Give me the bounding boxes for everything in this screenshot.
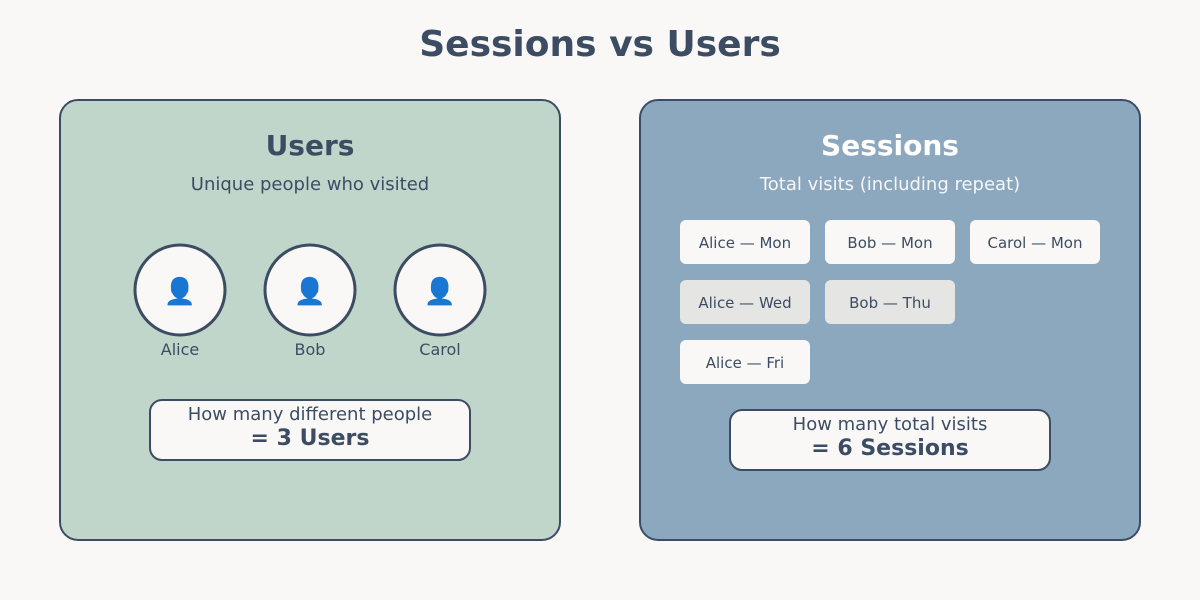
users result box	[150, 400, 470, 460]
sessions result box	[730, 410, 1050, 470]
users result box: How many different people	[188, 404, 432, 425]
user icon: Carol: Carol	[419, 340, 461, 359]
user icon: Bob	[265, 245, 355, 359]
title: Sessions vs Users	[419, 24, 781, 65]
user icon: Bob: 👤	[294, 276, 326, 307]
session chips: Carol — Mon	[987, 234, 1083, 252]
session chips: Alice — Fri	[706, 354, 784, 372]
user icon: Carol: 👤	[424, 276, 456, 307]
panel: users	[60, 100, 560, 540]
users subtitle: Unique people who visited	[191, 174, 429, 195]
sessions result box: = 6 Sessions	[811, 436, 969, 461]
user icon: Bob: Bob	[295, 340, 325, 359]
user icon: Alice: 👤	[164, 276, 196, 307]
users heading: Users	[266, 129, 354, 162]
session chips	[680, 220, 1100, 384]
user icon: Carol	[395, 245, 485, 359]
session chips: Bob — Mon	[847, 234, 933, 252]
sessions heading: Sessions	[821, 129, 959, 162]
sessions subtitle: Total visits (including repeat)	[759, 174, 1020, 195]
session chips: Alice — Wed	[698, 294, 792, 312]
users result box: = 3 Users	[251, 426, 369, 451]
user icon: Alice: Alice	[161, 340, 199, 359]
user icon: Alice	[135, 245, 225, 359]
sessions result box: How many total visits	[793, 414, 987, 435]
session chips: Bob — Thu	[849, 294, 931, 312]
session chips: Alice — Mon	[699, 234, 791, 252]
panel: sessions	[640, 100, 1140, 540]
